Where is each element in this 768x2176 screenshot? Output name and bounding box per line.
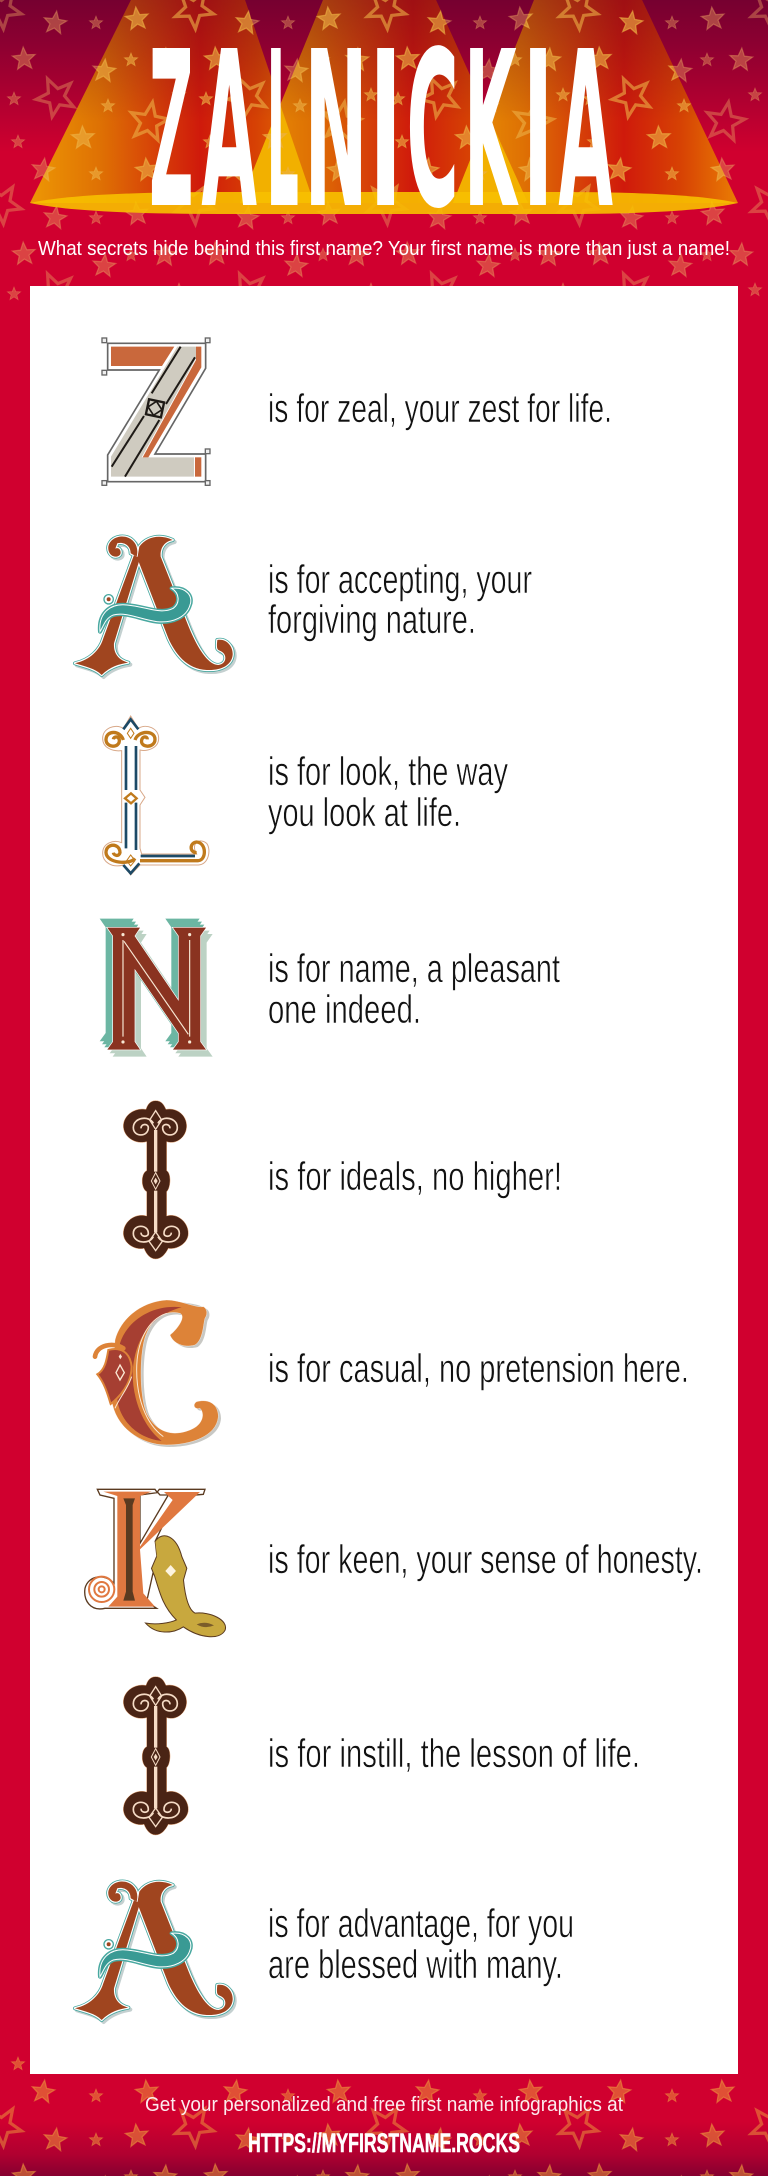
row: A second — [75, 1881, 574, 2022]
icon: letter I — [123, 1101, 188, 1259]
text: I second: is for instill, the lesson of life. — [268, 1732, 640, 1776]
row: N — [100, 919, 560, 1057]
title: L — [266, 5, 299, 256]
text: L — [268, 750, 508, 835]
star pattern top — [0, 0, 768, 310]
title — [149, 5, 613, 257]
footer url: HTTPS://MYFIRSTNAME.ROCKS — [248, 2128, 520, 2158]
footer text: Get your personalized and free first name infographics at — [145, 2094, 623, 2116]
text: N — [268, 947, 560, 1032]
title: I — [522, 5, 554, 256]
text: A: forgiving nature. — [268, 598, 476, 642]
text: N: is for name, a pleasant — [268, 947, 560, 991]
row: A — [75, 536, 532, 677]
icon: letter I second — [123, 1677, 188, 1835]
text: Z: is for zeal, your zest for life. — [268, 387, 612, 431]
text: L: you look at life. — [268, 791, 461, 835]
row: I second — [123, 1677, 640, 1835]
title: Z — [149, 6, 193, 257]
text: A — [268, 558, 532, 642]
title: A — [201, 5, 257, 256]
icon: letter N — [100, 919, 213, 1057]
text: A: is for accepting, your — [268, 558, 532, 602]
title: K — [464, 5, 519, 256]
row: L — [103, 716, 508, 875]
spotlight pool — [30, 192, 738, 214]
subtitle: What secrets hide behind this first name? Your first name is more than just a name! — [38, 238, 730, 260]
title: I — [369, 5, 402, 256]
row: Z — [102, 338, 612, 485]
spotlights — [30, 0, 738, 203]
icon: letter C — [95, 1300, 221, 1447]
icon: letter L — [103, 716, 209, 875]
text: A second: is for advantage, for you — [268, 1902, 574, 1946]
white panel — [30, 286, 738, 2074]
text: L: is for look, the way — [268, 750, 508, 794]
row: C — [95, 1300, 689, 1447]
title: C — [406, 5, 459, 256]
row: K — [85, 1489, 703, 1637]
text: A second — [268, 1902, 574, 1987]
star pattern bottom — [0, 2050, 768, 2176]
row: I — [123, 1101, 562, 1259]
text: N: one indeed. — [268, 988, 421, 1032]
text: I: is for ideals, no higher! — [268, 1155, 562, 1199]
text: A second: are blessed with many. — [268, 1943, 563, 1987]
icon: letter K — [85, 1489, 225, 1637]
icon: letter A — [75, 536, 235, 677]
icon: letter A second — [75, 1881, 235, 2022]
title: A — [558, 5, 613, 256]
title: N — [304, 6, 368, 257]
icon: letter Z — [102, 338, 210, 485]
